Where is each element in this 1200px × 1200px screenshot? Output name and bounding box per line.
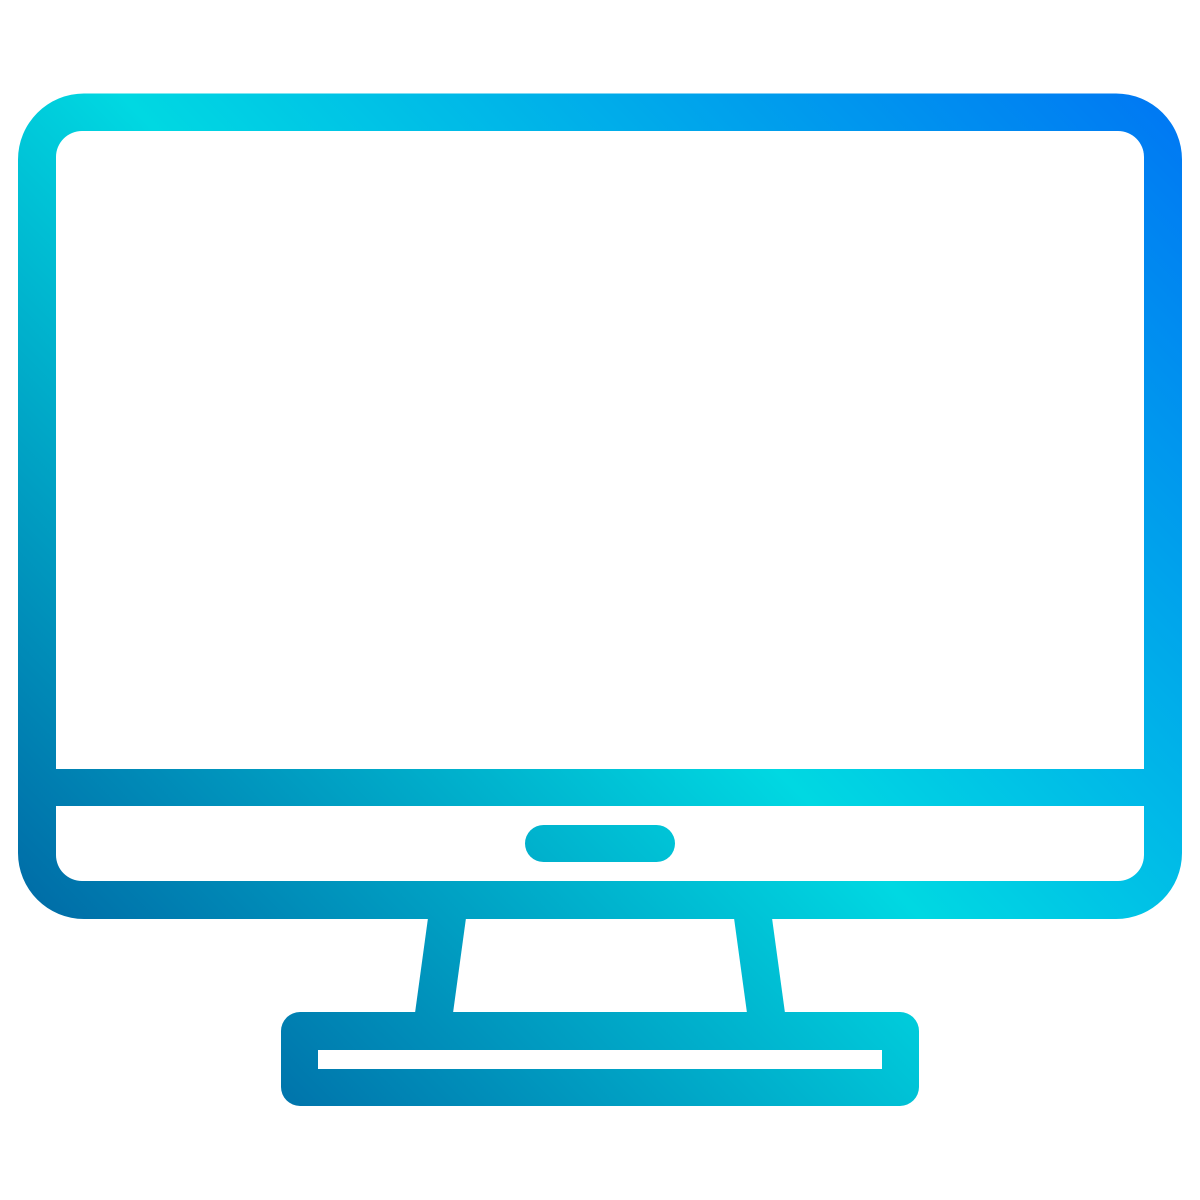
monitor stand	[281, 918, 919, 1106]
base	[281, 1012, 919, 1106]
left leg	[415, 918, 466, 1013]
power button	[525, 825, 675, 862]
right leg	[734, 918, 785, 1013]
screen frame	[18, 94, 1182, 919]
monitor body	[18, 94, 1182, 919]
